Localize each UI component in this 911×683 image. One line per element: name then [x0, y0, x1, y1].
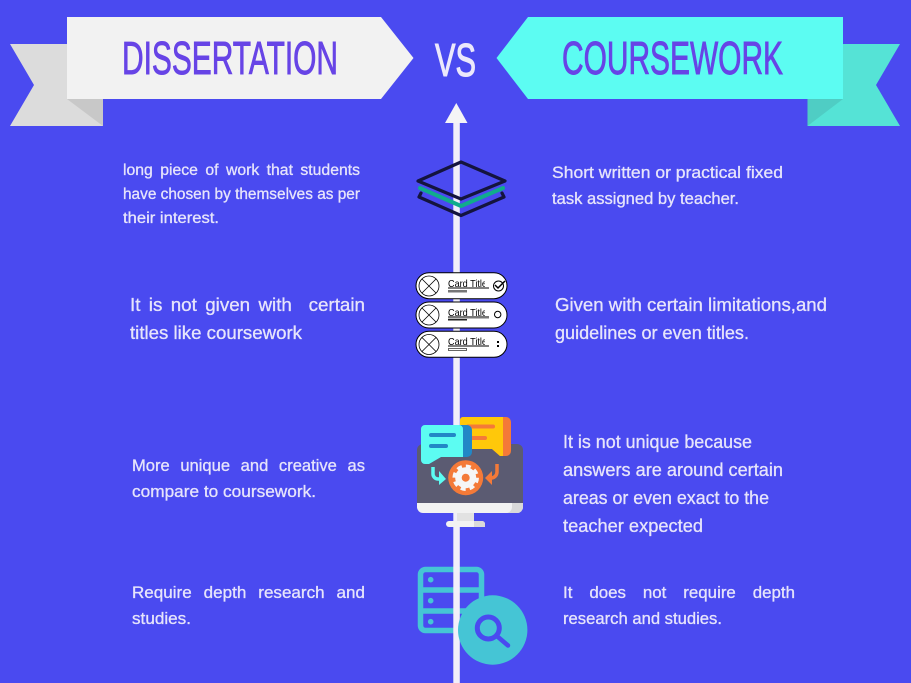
text: row 4 dissertation: Require depth research and	[132, 584, 365, 602]
icon: magnifying glass	[458, 595, 527, 665]
icon: monitor with chat bubbles and gear	[417, 417, 523, 527]
card 3: Card Title	[448, 336, 487, 348]
text: row 3 coursework: areas or even exact to the	[563, 488, 769, 508]
text: row 4 coursework: research and studies.	[563, 610, 722, 628]
text: row 4 coursework: It does not require depth	[563, 584, 795, 602]
text: row 1 coursework: Short written or practical fixed	[552, 163, 783, 182]
text: row 2 dissertation	[130, 295, 365, 343]
text: row 2 dissertation: titles like coursework	[130, 323, 303, 343]
central arrow axis	[445, 103, 468, 683]
text: row 1 dissertation: their interest.	[123, 210, 219, 227]
text: row 4 dissertation	[132, 584, 365, 628]
text: row 3 dissertation: compare to coursework.	[132, 483, 316, 501]
banner: coursework	[496, 17, 900, 126]
text: row 4 dissertation: studies.	[132, 610, 191, 628]
icon: server rack (behind axis)	[420, 570, 482, 630]
text: row 3 coursework: It is not unique because	[563, 432, 752, 452]
text: row 3 coursework	[563, 432, 783, 536]
text: row 3 coursework: teacher expected	[563, 516, 703, 536]
text: row 2 coursework: Given with certain limitations,and	[555, 295, 827, 315]
icon: stacked layers	[418, 162, 505, 216]
text: row 2 coursework	[555, 295, 827, 343]
banner: dissertation	[10, 17, 414, 126]
text: row 3 dissertation	[132, 457, 365, 501]
icon: card list	[416, 273, 507, 357]
card 1: Card Title	[448, 278, 487, 290]
text: row 1 coursework: task assigned by teacher.	[552, 189, 739, 208]
VS label: VS	[435, 34, 476, 86]
text: row 3 dissertation: More unique and creative as	[132, 457, 365, 475]
text: row 1 dissertation: have chosen by themselves as per	[123, 186, 360, 203]
text: row 2 dissertation: It is not given with certain	[130, 295, 365, 315]
banner: coursework: COURSEWORK	[562, 32, 783, 84]
card 2: Card Title	[448, 307, 487, 319]
text: row 4 coursework	[563, 584, 795, 628]
text: row 2 coursework: guidelines or even titles.	[555, 323, 749, 343]
text: row 1 dissertation	[123, 162, 360, 227]
banner: dissertation: DISSERTATION	[122, 32, 338, 84]
text: row 1 dissertation: long piece of work that students	[123, 162, 360, 179]
text: row 1 coursework	[552, 163, 783, 208]
text: row 3 coursework: answers are around certain	[563, 460, 783, 480]
